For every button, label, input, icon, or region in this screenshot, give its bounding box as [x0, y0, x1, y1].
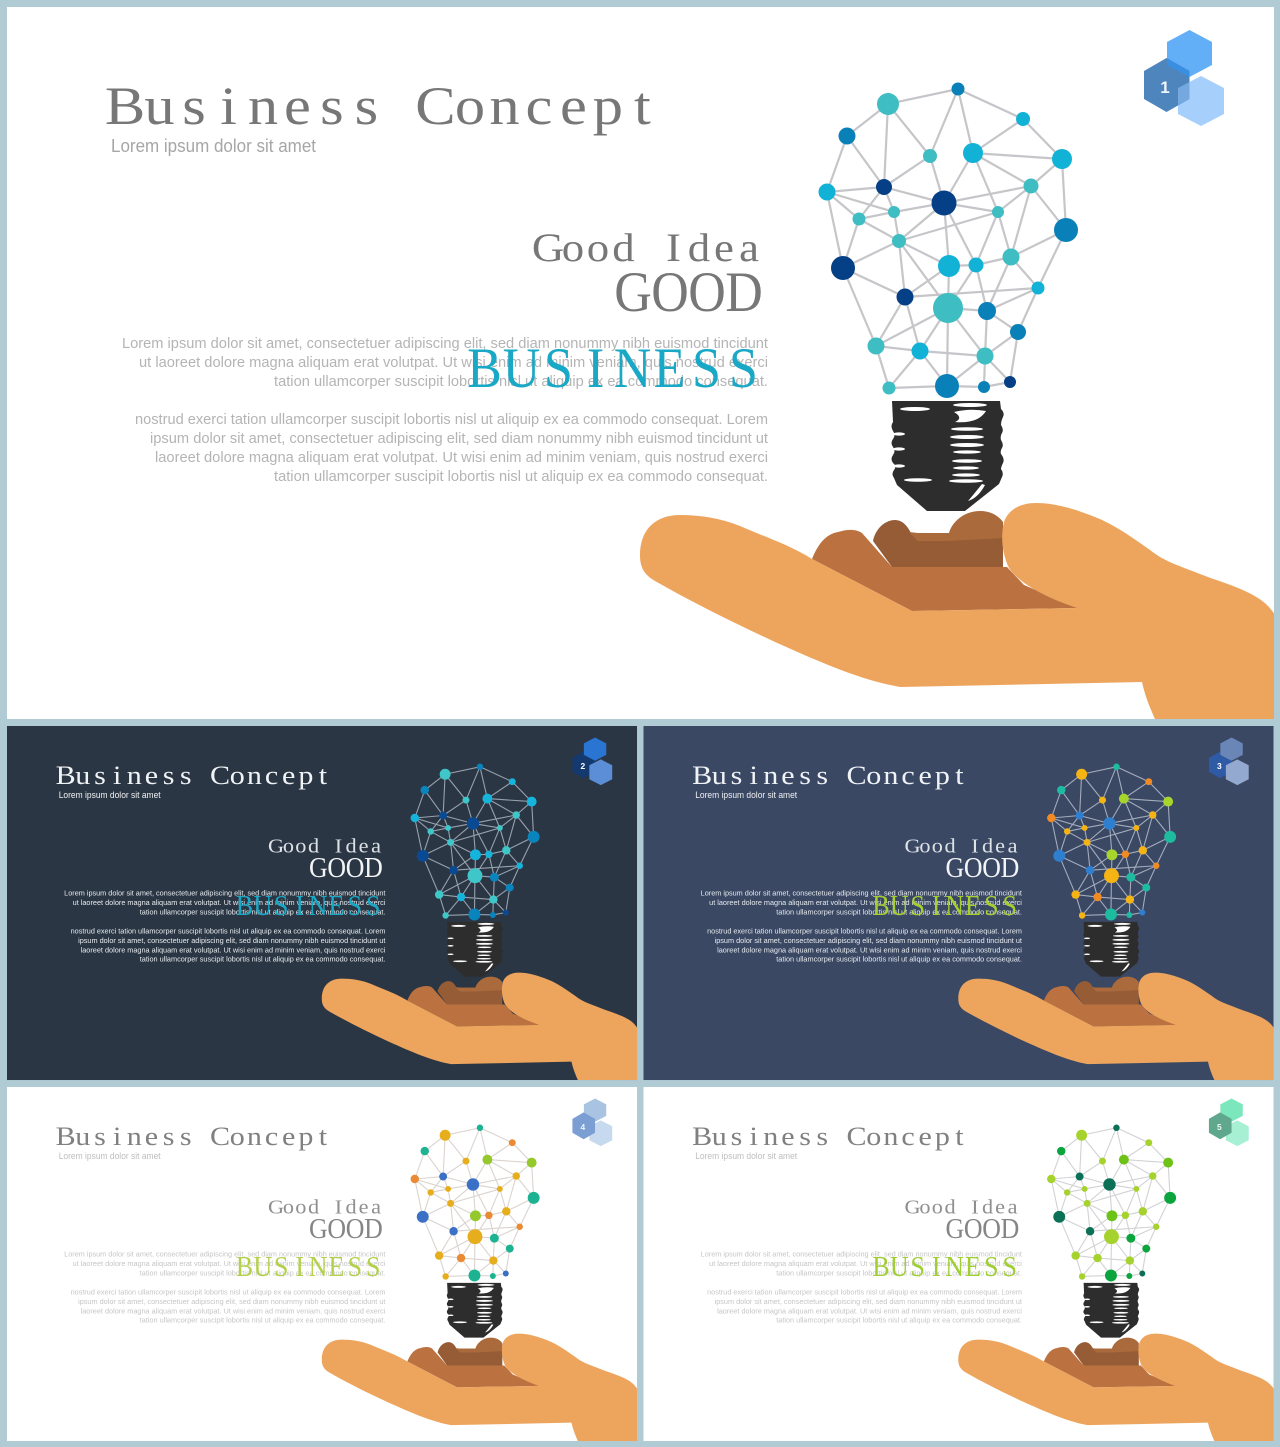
- icon: hexagon badge 1: [1144, 30, 1224, 126]
- slide background: [7, 726, 637, 1080]
- heading: Good Idea: Good Idea: [905, 1195, 1018, 1218]
- icon: bulb screw base: [447, 1283, 503, 1338]
- body text: ipsum dolor sit amet, consectetuer adipiscing elit, sed diam nonummy nibh euismod tincidunt ut: [715, 1297, 1023, 1306]
- body text: ut laoreet dolore magna aliquam erat volutpat. Ut wisi enim ad minim veniam, quis nostrud exerci: [139, 354, 768, 371]
- heading: Good Idea: Good Idea: [268, 1195, 382, 1218]
- icon: open hand: [322, 973, 638, 1080]
- panel: slide 2 (dark, teal bulb): [7, 726, 638, 1080]
- icon: open hand: [322, 1334, 638, 1441]
- body text: [701, 889, 1023, 964]
- body text: [122, 335, 769, 485]
- body text: tation ullamcorper suscipit lobortis nisl ut aliquip ex ea commodo consequat.: [776, 907, 1022, 916]
- heading: GOOD: GOOD: [309, 852, 383, 883]
- icon: hexagon badge 4: [572, 1098, 612, 1146]
- icon: network light bulb: [411, 1125, 540, 1281]
- body text: laoreet dolore magna aliquam erat volutpat. Ut wisi enim ad minim veniam, quis nostrud exerci: [717, 1306, 1022, 1315]
- heading: BUSINESS: BUSINESS: [236, 890, 380, 921]
- body text: Lorem ipsum dolor sit amet, consectetuer adipiscing elit, sed diam nonummy nibh euismod tincidunt: [64, 1250, 386, 1259]
- body text: laoreet dolore magna aliquam erat volutpat. Ut wisi enim ad minim veniam, quis nostrud exerci: [155, 449, 768, 466]
- body text: Lorem ipsum dolor sit amet, consectetuer adipiscing elit, sed diam nonummy nibh euismod tincidunt: [701, 1250, 1023, 1259]
- icon: network light bulb: [1047, 764, 1176, 920]
- heading: BUSINESS: BUSINESS: [872, 890, 1017, 921]
- body text: [64, 1250, 386, 1325]
- icon: open hand: [640, 503, 1275, 719]
- body text: nostrud exerci tation ullamcorper suscipit lobortis nisl ut aliquip ex ea commodo consequat. Lorem: [707, 926, 1022, 935]
- body text: Lorem ipsum dolor sit amet, consectetuer adipiscing elit, sed diam nonummy nibh euismod tincidunt: [122, 335, 769, 352]
- body text: nostrud exerci tation ullamcorper suscipit lobortis nisl ut aliquip ex ea commodo consequat. Lorem: [707, 1287, 1022, 1296]
- body text: tation ullamcorper suscipit lobortis nisl ut aliquip ex ea commodo consequat.: [776, 1268, 1022, 1277]
- icon: bulb screw base: [1083, 922, 1139, 977]
- body text: laoreet dolore magna aliquam erat volutpat. Ut wisi enim ad minim veniam, quis nostrud exerci: [81, 945, 386, 954]
- body text: [701, 1250, 1023, 1325]
- body text: tation ullamcorper suscipit lobortis nisl ut aliquip ex ea commodo consequat.: [776, 1316, 1022, 1325]
- heading: GOOD: GOOD: [945, 852, 1019, 883]
- body text: nostrud exerci tation ullamcorper suscipit lobortis nisl ut aliquip ex ea commodo consequat. Lorem: [71, 1287, 385, 1296]
- icon: hexagon badge 1: 1: [1160, 78, 1170, 97]
- heading: GOOD: GOOD: [614, 260, 763, 324]
- icon: network light bulb: [818, 82, 1078, 398]
- subtitle: Lorem ipsum dolor sit amet: [59, 1151, 161, 1161]
- icon: hexagon badge 3: [1209, 737, 1249, 785]
- title: Business Concept: [692, 1123, 964, 1152]
- subtitle: Lorem ipsum dolor sit amet: [111, 136, 316, 156]
- title: Business Concept: [692, 762, 964, 791]
- body text: tation ullamcorper suscipit lobortis nisl ut aliquip ex ea commodo consequat.: [140, 1268, 385, 1277]
- subtitle: Lorem ipsum dolor sit amet: [695, 790, 798, 800]
- heading: Good Idea: Good Idea: [532, 226, 759, 270]
- body text: ipsum dolor sit amet, consectetuer adipiscing elit, sed diam nonummy nibh euismod tincidunt ut: [78, 936, 386, 945]
- title: Business Concept: [56, 1123, 327, 1152]
- subtitle: Lorem ipsum dolor sit amet: [695, 1151, 798, 1161]
- heading: GOOD: GOOD: [945, 1213, 1019, 1244]
- slide background: [7, 7, 1274, 719]
- panel: slide 5 (white, green bulb): [644, 1087, 1274, 1441]
- body text: nostrud exerci tation ullamcorper suscipit lobortis nisl ut aliquip ex ea commodo consequat. Lorem: [135, 411, 768, 428]
- body text: tation ullamcorper suscipit lobortis nisl ut aliquip ex ea commodo consequat.: [274, 468, 768, 485]
- heading: Good Idea: Good Idea: [905, 834, 1018, 857]
- body text: ut laoreet dolore magna aliquam erat volutpat. Ut wisi enim ad minim veniam, quis nostrud exerci: [73, 898, 386, 907]
- icon: bulb screw base: [447, 922, 503, 977]
- body text: tation ullamcorper suscipit lobortis nisl ut aliquip ex ea commodo consequat.: [274, 373, 768, 390]
- heading: BUSINESS: BUSINESS: [872, 1251, 1017, 1282]
- heading: BUSINESS: BUSINESS: [236, 1251, 380, 1282]
- icon: hexagon badge 4: 4: [581, 1122, 586, 1132]
- title: Business Concept: [56, 762, 327, 791]
- slide background: [644, 1087, 1274, 1441]
- subtitle: Lorem ipsum dolor sit amet: [59, 790, 161, 800]
- body text: tation ullamcorper suscipit lobortis nisl ut aliquip ex ea commodo consequat.: [140, 907, 385, 916]
- panel: slide 3 (slate blue, multicolour bulb): [644, 726, 1274, 1080]
- body text: ut laoreet dolore magna aliquam erat volutpat. Ut wisi enim ad minim veniam, quis nostrud exerci: [709, 898, 1022, 907]
- body text: ipsum dolor sit amet, consectetuer adipiscing elit, sed diam nonummy nibh euismod tincidunt ut: [150, 430, 769, 447]
- body text: ut laoreet dolore magna aliquam erat volutpat. Ut wisi enim ad minim veniam, quis nostrud exerci: [73, 1259, 386, 1268]
- icon: hexagon badge 5: 5: [1217, 1122, 1222, 1132]
- icon: hexagon badge 5: [1209, 1098, 1249, 1146]
- heading: Good Idea: Good Idea: [268, 834, 382, 857]
- body text: tation ullamcorper suscipit lobortis nisl ut aliquip ex ea commodo consequat.: [776, 955, 1022, 964]
- body text: ut laoreet dolore magna aliquam erat volutpat. Ut wisi enim ad minim veniam, quis nostrud exerci: [709, 1259, 1022, 1268]
- heading: GOOD: GOOD: [309, 1213, 383, 1244]
- slide background: [7, 1087, 637, 1441]
- icon: hexagon badge 2: 2: [581, 761, 586, 771]
- icon: hexagon badge 3: 3: [1217, 761, 1222, 771]
- icon: open hand: [958, 973, 1274, 1080]
- icon: bulb screw base: [1083, 1283, 1139, 1338]
- body text: tation ullamcorper suscipit lobortis nisl ut aliquip ex ea commodo consequat.: [140, 955, 385, 964]
- icon: network light bulb: [1047, 1125, 1176, 1281]
- body text: laoreet dolore magna aliquam erat volutpat. Ut wisi enim ad minim veniam, quis nostrud exerci: [717, 945, 1022, 954]
- icon: network light bulb: [411, 764, 540, 920]
- heading: BUSINESS: BUSINESS: [467, 336, 758, 400]
- body text: Lorem ipsum dolor sit amet, consectetuer adipiscing elit, sed diam nonummy nibh euismod tincidunt: [701, 889, 1023, 898]
- panel: main slide 1 (white, teal bulb): [7, 7, 1275, 719]
- icon: hexagon badge 2: [572, 737, 612, 785]
- slide background: [644, 726, 1274, 1080]
- panel: slide 4 (white, multicolour bulb): [7, 1087, 638, 1441]
- body text: ipsum dolor sit amet, consectetuer adipiscing elit, sed diam nonummy nibh euismod tincidunt ut: [78, 1297, 386, 1306]
- icon: bulb screw base: [892, 401, 1004, 511]
- body text: Lorem ipsum dolor sit amet, consectetuer adipiscing elit, sed diam nonummy nibh euismod tincidunt: [64, 889, 386, 898]
- title: Business Concept: [105, 77, 651, 136]
- body text: ipsum dolor sit amet, consectetuer adipiscing elit, sed diam nonummy nibh euismod tincidunt ut: [715, 936, 1023, 945]
- body text: [64, 889, 386, 964]
- body text: nostrud exerci tation ullamcorper suscipit lobortis nisl ut aliquip ex ea commodo consequat. Lorem: [71, 926, 385, 935]
- body text: tation ullamcorper suscipit lobortis nisl ut aliquip ex ea commodo consequat.: [140, 1316, 385, 1325]
- icon: open hand: [958, 1334, 1274, 1441]
- body text: laoreet dolore magna aliquam erat volutpat. Ut wisi enim ad minim veniam, quis nostrud exerci: [81, 1306, 386, 1315]
